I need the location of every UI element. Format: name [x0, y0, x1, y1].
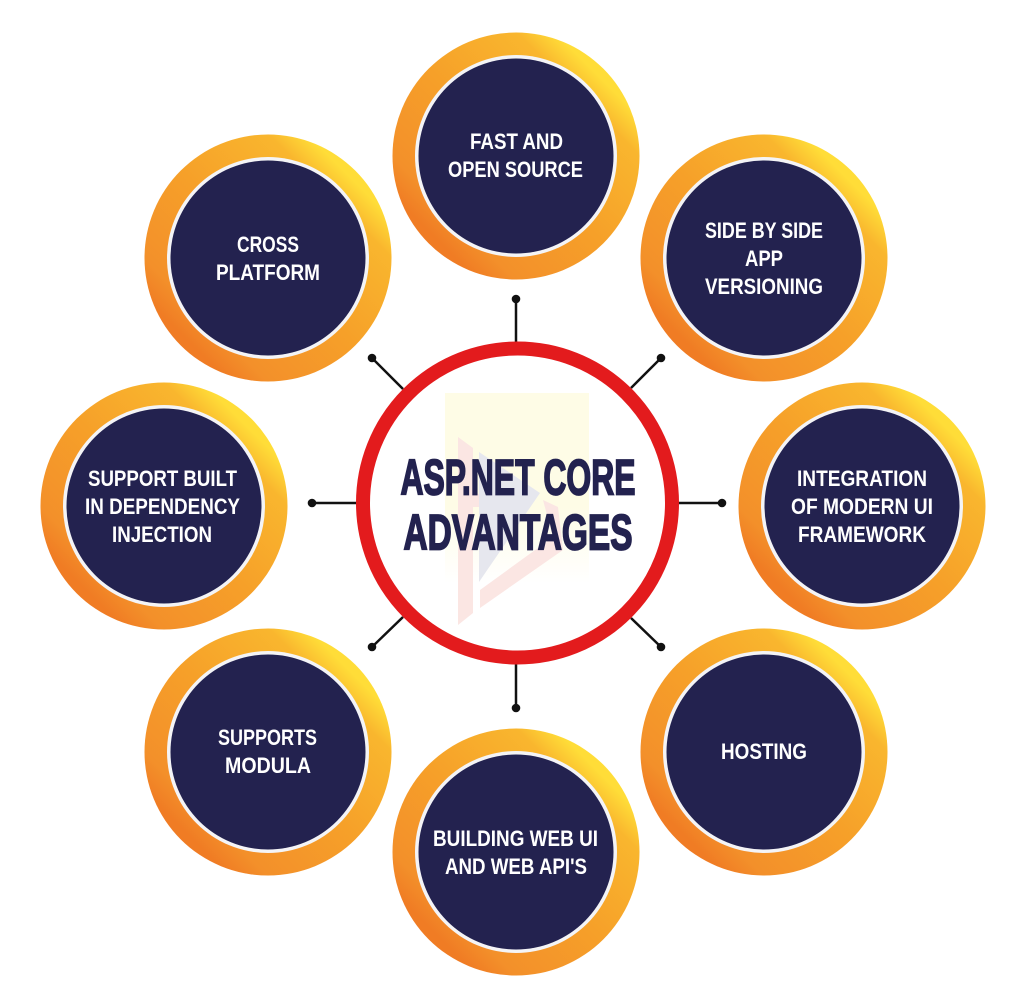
node: Support built in dependency injection: SUPPORT BUILT: [88, 466, 237, 491]
node: Integration of modern UI framework: [738, 382, 986, 630]
title text: [400, 450, 636, 560]
node: Side by side app versioning: [640, 134, 888, 382]
node: Side by side app versioning: VERSIONING: [705, 274, 823, 299]
node: Fast and open source: [392, 32, 640, 280]
node: Building web UI and web APIs: BUILDING WEB UI: [433, 826, 598, 851]
node: Integration of modern UI framework: INTEGRATION: [797, 466, 927, 491]
node: Supports modula: [144, 628, 392, 876]
node: Support built in dependency injection: [40, 382, 288, 630]
node: Fast and open source: OPEN SOURCE: [448, 157, 583, 182]
node: Fast and open source: FAST AND: [470, 129, 563, 154]
node: Hosting: HOSTING: [721, 739, 807, 764]
connector lines with dots: [308, 295, 726, 712]
node: Cross platform: [144, 134, 392, 382]
node: Cross platform: PLATFORM: [216, 260, 320, 285]
title text: ADVANTAGES: [404, 504, 632, 560]
node: Building web UI and web APIs: [392, 728, 640, 976]
node: Building web UI and web APIs: AND WEB API'S: [445, 854, 587, 879]
node: Support built in dependency injection: IN DEPENDENCY: [85, 494, 240, 519]
centre hub: title circle: [363, 348, 672, 658]
node: Supports modula: SUPPORTS: [218, 725, 317, 750]
title text: ASP.NET CORE: [400, 450, 636, 506]
watermark logo: [445, 393, 589, 625]
node: Integration of modern UI framework: FRAMEWORK: [798, 522, 926, 547]
node: Side by side app versioning: SIDE BY SIDE: [705, 218, 823, 243]
node: Integration of modern UI framework: OF MODERN UI: [791, 494, 933, 519]
node: Hosting: [640, 628, 888, 876]
node: Support built in dependency injection: INJECTION: [112, 522, 212, 547]
node: Supports modula: MODULA: [225, 753, 311, 778]
node: Cross platform: CROSS: [237, 232, 299, 257]
node: Side by side app versioning: APP: [745, 246, 783, 271]
